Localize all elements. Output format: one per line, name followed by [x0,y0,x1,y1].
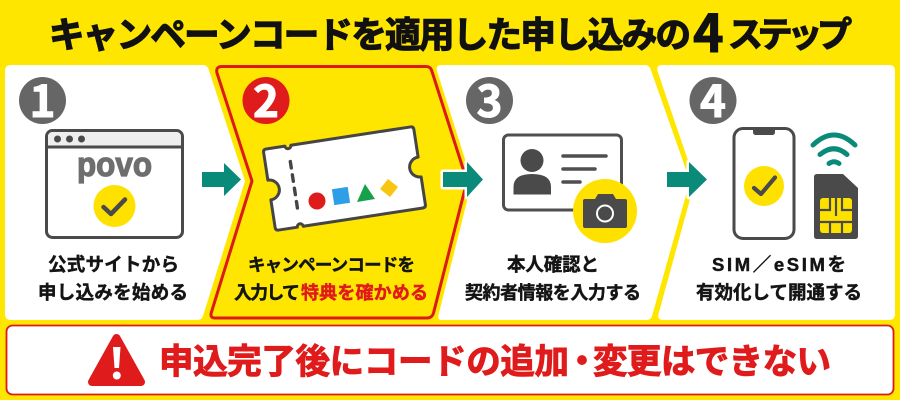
step 3 number: 3 [477,66,502,130]
icon: smartphone with check [734,128,794,238]
panel: step 2 highlighted [211,66,467,318]
panel: step 3 [437,65,690,320]
title: キャンペーンコードを適用した申し込みの [49,15,691,55]
step 2 number: 2 [253,66,279,130]
arrow: step 2 to 3 [443,162,483,197]
arrow: step 1 to 2 [202,163,241,196]
title [49,0,852,67]
step 1 caption [38,254,188,303]
panel: step 4 [657,65,895,320]
icon: warning triangle [92,338,141,382]
step 1 caption: 申し込みを始める [38,282,188,303]
step 4 caption [696,254,862,303]
warning text: ・ [565,344,599,382]
icon: browser window with povo logo [46,130,182,238]
step 2 caption: 入力して [234,283,300,303]
step 3 caption: 契約者情報を入力する [465,283,641,303]
warning text: 変更はできない [593,344,831,382]
title: ステップ [728,16,852,55]
step 1 number: 1 [30,66,55,130]
warning text: 申込完了後にコードの追加 [159,344,569,382]
step 3 caption: 本人確認と [507,254,599,275]
panel: warning banner [6,326,894,394]
icon: ID card with camera [504,135,637,243]
step 4 caption: 有効化して開通する [696,282,862,303]
icon: coupon ticket [263,126,426,231]
step 2 caption: 特典を確かめる [301,282,428,303]
icon: browser window with povo logo: povo [77,146,152,184]
step 2 number [242,66,290,130]
step 1 number [19,66,66,130]
step 1 caption: 公式サイトから [48,254,179,275]
step 4 caption: SIM／eSIMを [712,254,846,275]
step 4 number [690,66,736,130]
icon: SIM card [814,174,858,239]
panel: step 1 [5,65,245,320]
step 4 number: 4 [700,66,726,130]
warning text [159,344,831,382]
arrow: step 3 to 4 [667,162,707,197]
step 2 caption: キャンペーンコードを [248,255,415,275]
step 2 caption [234,255,428,303]
icon: wifi signal [813,135,855,164]
step 3 number [466,66,513,130]
step 3 caption [465,254,641,303]
